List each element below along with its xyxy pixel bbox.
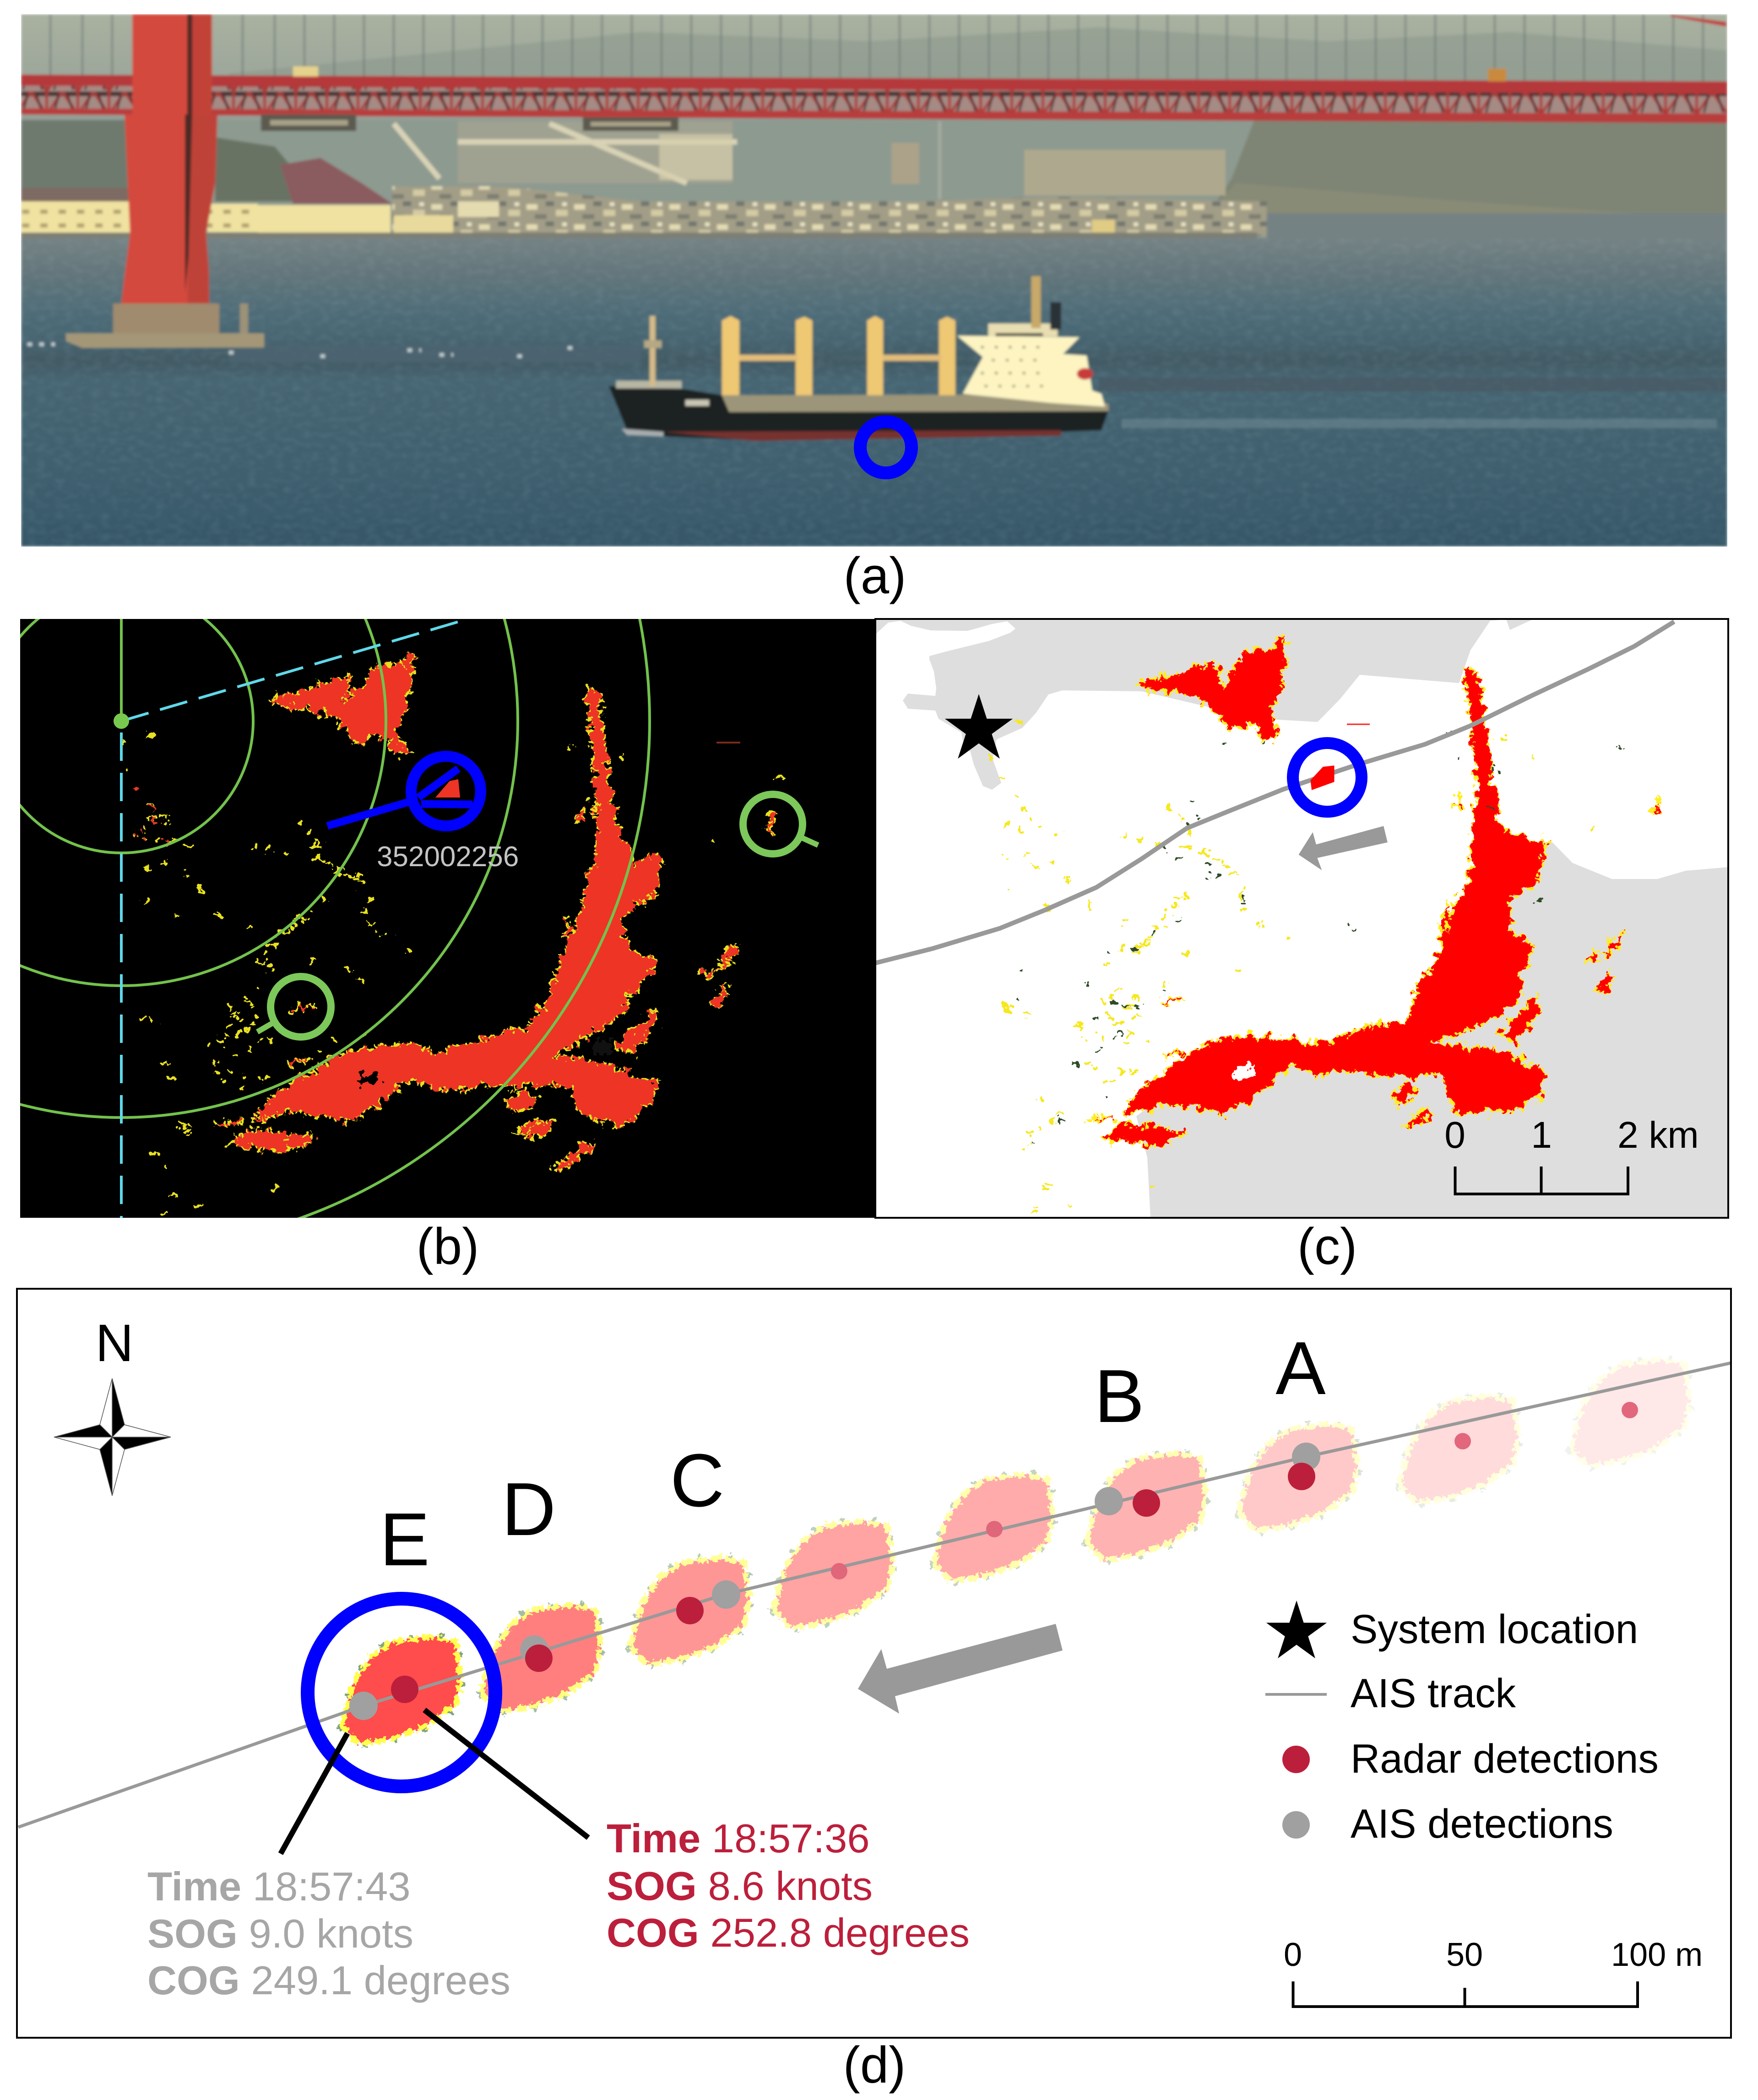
callout leader lines [281,1710,588,1854]
radar returns [123,657,781,1212]
detection letters [380,1326,1326,1581]
legend labels: Radar detections [1351,1736,1659,1781]
north label: N [95,1314,134,1373]
legend radar dot [1282,1746,1310,1773]
AIS detection data [147,1864,510,2003]
detection letters: A [1275,1326,1326,1410]
green target markers [257,794,818,1037]
scale bar 2 km: 0 [1444,1114,1465,1156]
blue ring around detection E [308,1599,495,1786]
radar returns [988,640,1660,1210]
scale bar 100 m [1284,1937,1703,2007]
detection letters: E [380,1498,430,1581]
radar detection data [607,1816,970,1955]
guard zone dashed boundary [121,619,468,1218]
scale bar 100 m: 0 [1284,1937,1302,1973]
grey heading arrow [1299,826,1388,870]
detection letters: C [670,1438,724,1522]
ship echoes over time [339,1356,1693,1747]
shipping channel track [875,622,1674,963]
maintenance platforms under deck [261,114,678,131]
detection letters: D [502,1467,556,1551]
wave bands [27,344,1727,428]
yellow clutter [988,722,1596,1210]
cranes [722,316,955,395]
radar detections [391,1402,1638,1703]
AIS detection data: SOG 9.0 knots [147,1911,413,1956]
legend AIS dot [1282,1811,1310,1839]
panel: (d) detail of radar and AIS detections [17,1289,1731,2038]
legend labels: System location [1351,1606,1638,1652]
superstructure [957,336,1105,407]
panel: (c) map of radar detections [875,619,1728,1218]
panel: (a) photograph of cargo ship under bridge [21,14,1727,547]
scale bar 2 km: 2 km [1617,1114,1699,1156]
AIS detections [349,1443,1320,1720]
radar detection data: Time 18:57:36 [607,1816,870,1861]
scale bar 2 km [1444,1114,1699,1194]
blue AIS target marker [327,756,481,826]
red-roofed hill [280,158,392,204]
suspender cables [50,14,1703,81]
label (b): (b) [417,1218,479,1275]
label (a): (a) [844,547,906,604]
radar detection data: COG 252.8 degrees [607,1910,970,1955]
legend labels: AIS detections [1351,1801,1613,1846]
range rings [0,193,650,1249]
bridge tower [66,14,264,348]
distant return line [716,742,740,743]
sky and distant hills [21,14,1727,124]
label (d): (d) [843,2036,906,2094]
tracked ship echo [1311,765,1335,790]
hatch covers [722,395,1109,412]
bay water [21,238,1727,547]
bridge deck and truss [21,15,1727,123]
background shoreline haze [21,120,1727,244]
system location star [945,694,1013,759]
scattered sea clutter [123,735,781,1212]
legend star [1266,1601,1327,1658]
AIS detection data: COG 249.1 degrees [147,1958,510,2003]
scale bar 100 m: 100 m [1611,1937,1703,1973]
legend [1265,1601,1659,1846]
AIS detection data: Time 18:57:43 [147,1864,411,1909]
legend labels [1351,1606,1659,1846]
white gaps in echoes [1232,1063,1256,1080]
photo contents [21,14,1727,547]
land areas [876,619,1728,1218]
label (c): (c) [1297,1218,1357,1275]
hill silhouettes behind cables [229,27,1727,82]
blue ring marker [860,422,912,473]
water texture [21,239,1727,547]
radar detection data: SOG 8.6 knots [607,1863,873,1909]
panel (c) frame [875,619,1728,1218]
dark green clutter [1020,733,1622,1141]
heading arrow [858,1624,1063,1714]
distant return line [1347,723,1370,725]
detection letters: B [1094,1354,1145,1438]
AIS track line [18,1363,1731,1827]
radar origin dot [114,713,129,729]
shoreline town [392,186,1267,236]
cargo ship [609,276,1109,441]
panel: (b) radar display [0,193,875,1249]
legend labels: AIS track [1351,1670,1516,1716]
MMSI label: 352002256 [377,841,519,873]
legend track line [1265,1693,1327,1696]
tracked ship echo [435,779,460,798]
compass rose [54,1378,171,1496]
panel (d) frame [17,1289,1731,2038]
land clutter echoes [1091,640,1660,1147]
land clutter echoes [217,657,776,1172]
blue ring around tracked ship [1293,743,1362,812]
waterfront yellow buildings [21,201,1257,238]
foremast [650,316,656,386]
hull [609,386,1109,440]
scale bar 2 km: 1 [1531,1114,1552,1156]
scale bar 100 m: 50 [1446,1937,1483,1973]
